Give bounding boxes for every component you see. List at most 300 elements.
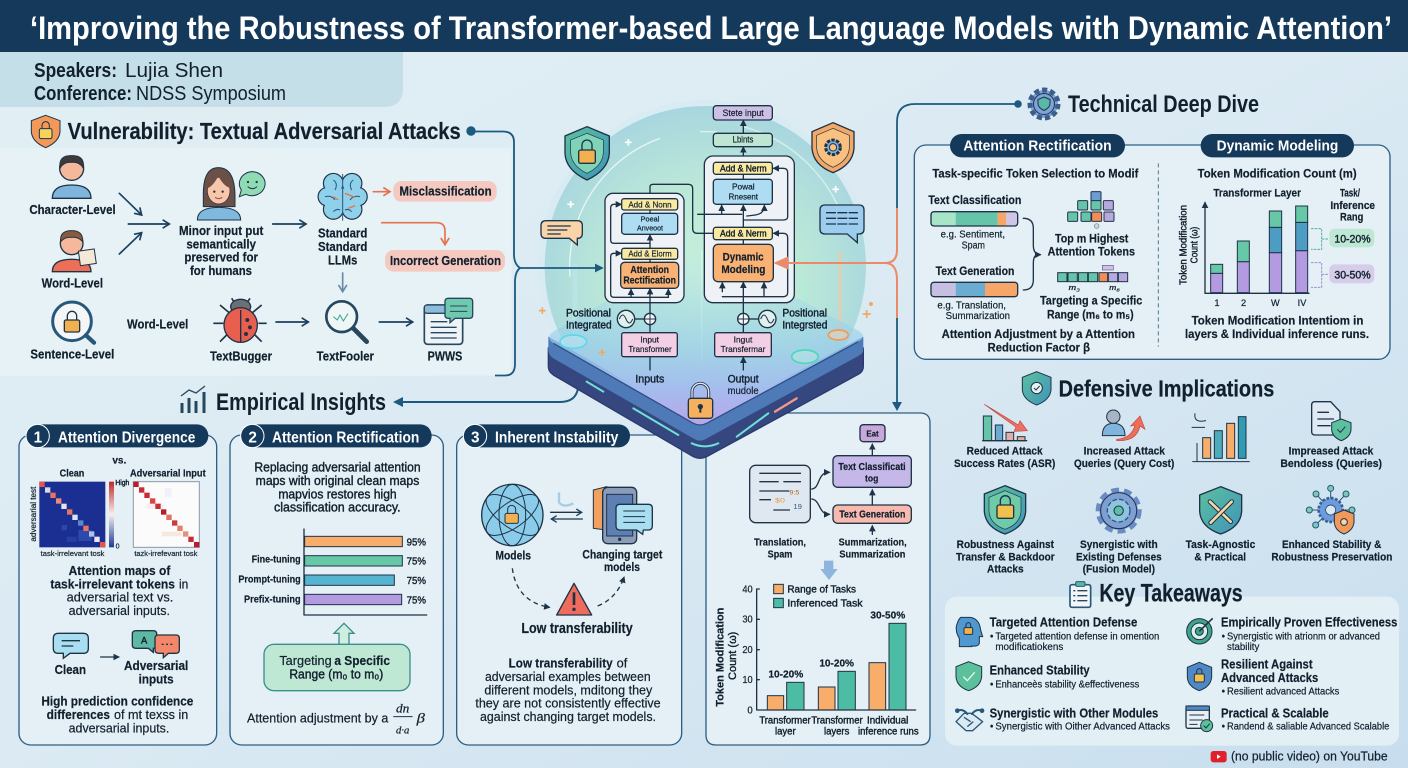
text: attention adjustment — [942, 327, 1135, 354]
bar chart: token modification count — [714, 584, 919, 737]
attention rectification block: Rectification — [623, 276, 676, 287]
arrow: to misclassification — [373, 189, 390, 194]
takeaway: synergistic: Synergistic with Other Modules — [990, 706, 1158, 720]
bar chart: accuracy: 75% — [407, 557, 426, 568]
text: top m tokens — [1048, 231, 1135, 259]
label: increased attack: Increased Attack — [1084, 446, 1166, 458]
heatmap: adversarial — [133, 482, 199, 547]
header pill: Attention Divergence — [58, 429, 195, 446]
label: impreased attack: Bendoless (Queries) — [1280, 458, 1382, 470]
takeaway: practical: • — [1222, 722, 1225, 733]
icon: adversarial bubbles — [132, 631, 179, 658]
label: enhanced stability: Robustness Preservation — [1271, 551, 1393, 563]
pill: dynamic modeling — [1201, 134, 1354, 157]
takeaway: resilient: Resilient Against — [1221, 657, 1313, 671]
heatmap labels: tazk-irrefevant tosk — [134, 549, 197, 558]
chart labels: Token Modification — [1179, 205, 1190, 285]
icon: chart empirical insights — [181, 386, 205, 413]
bar chart: token modification count: inference runs — [858, 726, 919, 737]
heading: key takeaways: Key Takeaways — [1099, 581, 1243, 608]
icon: blue message bubble — [820, 205, 864, 243]
attention rectification block: Attention — [630, 265, 669, 276]
box: state input — [713, 106, 772, 120]
label: robustness: Attacks — [987, 564, 1024, 576]
text: positional labels: Positional — [782, 308, 827, 320]
callout: targeting range: a Specific — [334, 654, 390, 668]
icon: document — [750, 465, 810, 523]
formula: attention adjustment: dn — [396, 701, 409, 715]
bar chart: token modification count: Transformer — [811, 715, 863, 726]
formula: attention adjustment: Attention adjustment by a — [247, 711, 389, 725]
bracket arrow — [1023, 218, 1040, 290]
pill: incorrect generation — [385, 250, 505, 272]
text: low transferability description: adversarial examples between — [485, 670, 651, 684]
text: attention adjustment: Reduction Factor β — [988, 340, 1090, 354]
stacked bar chart: W — [1271, 298, 1280, 308]
text: positional labels: Integrated — [566, 319, 612, 331]
takeaway: practical — [1221, 706, 1389, 733]
feed forward block: Powal — [732, 182, 755, 192]
takeaway: empirically proven — [1221, 616, 1397, 653]
box: text generation: Text Generation — [839, 510, 905, 521]
box: exit — [860, 425, 885, 442]
text: textfooler: TextFooler — [317, 350, 374, 364]
stacked bar chart — [1205, 203, 1309, 308]
arrow: minor input to LLM — [273, 221, 306, 226]
icon: green shield with lock — [565, 127, 609, 180]
text: standard LLMs: Standard — [318, 240, 367, 254]
icon: adversarial bubbles: A — [141, 636, 148, 646]
text: inputs and outputs — [635, 374, 759, 397]
bar chart: token modification count: 10-20% — [768, 669, 803, 680]
label: enhanced stability — [1271, 539, 1393, 563]
label: robustness — [956, 539, 1055, 576]
box: limits — [713, 133, 772, 147]
text: attention maps: task-irrelevant tokens — [50, 577, 175, 591]
bar chart: token modification count: layers — [824, 726, 849, 737]
stacked bar chart: IV — [1298, 298, 1307, 308]
label: word-level second: Word-Level — [127, 318, 188, 332]
text: modification intention — [1185, 314, 1369, 341]
arrow: LLM to textfooler — [340, 272, 345, 292]
label: increased attack: Queries (Query Cost) — [1074, 458, 1175, 470]
label: reduced attack: Reduced Attack — [967, 446, 1043, 458]
feed forward: Anveoot — [637, 223, 664, 232]
arrow: clean to adversarial — [101, 655, 119, 659]
bar chart: token modification count: layer — [775, 726, 796, 737]
bar chart: token modification count: Token Modification — [714, 607, 726, 707]
add and norm second: Add & Elorm — [628, 249, 672, 259]
wiring — [611, 121, 788, 370]
takeaway: synergistic — [990, 706, 1170, 733]
icon: document: $0 — [775, 497, 785, 504]
central illustration: transformer architecture on platform — [539, 100, 873, 458]
takeaway: resilient: • — [1222, 686, 1225, 697]
text: models and targets: Changing target — [582, 548, 662, 562]
label: impreased attack — [1280, 446, 1382, 470]
label: impreased attack: Impreased Attack — [1289, 446, 1374, 458]
bar chart: token modification count: Inferenced Task — [787, 599, 864, 610]
header pill: Inherent Instability — [495, 429, 619, 446]
bar chart: accuracy: 75% — [407, 595, 426, 606]
text: minor input: semantically — [186, 237, 256, 251]
icon: reduced bars — [983, 404, 1027, 441]
icon: blue shield lock — [1187, 662, 1212, 691]
box: text generation — [833, 505, 911, 523]
label: reduced attack — [954, 446, 1056, 470]
text generation bar: Text Generation — [936, 264, 1014, 278]
box: input transformer left: Transformer — [628, 344, 672, 354]
chart labels: Inference — [1330, 200, 1375, 212]
takeaway: enhanced stability: • — [990, 679, 993, 690]
icon: head with lock — [956, 617, 983, 647]
text: models and targets: models — [604, 560, 640, 574]
icon: clean bubble — [53, 633, 88, 658]
arrow: down to chart — [820, 561, 838, 580]
icon: person with arrow — [1102, 410, 1145, 441]
bar chart: token modification count: 10 — [742, 675, 753, 686]
heatmap labels: adversarial test — [29, 486, 38, 542]
text: minor input — [179, 224, 264, 278]
header pill — [463, 424, 630, 448]
icon: peach message bubble — [541, 221, 582, 245]
formula: attention adjustment: d·a — [396, 725, 409, 736]
takeaway: resilient: Advanced Attacks — [1221, 671, 1318, 685]
text: minor input: for humans — [190, 264, 252, 278]
icon: platform lock — [688, 383, 713, 418]
encoder stack — [605, 193, 684, 303]
header pill — [26, 424, 208, 448]
arrow: up to chart — [334, 623, 354, 646]
box: exit: Eat — [866, 428, 879, 438]
box: text classification: tog — [865, 474, 879, 484]
takeaway: targeted attention defense: Targeted Attention Defense — [990, 616, 1137, 630]
takeaway: enhanced stability: Enhanceès stability &effectiveness — [995, 679, 1139, 690]
label: reduced attack: Success Rates (ASR) — [954, 458, 1056, 470]
takeaway: targeted attention defense: Targeted attention defense in omention — [995, 631, 1159, 642]
dynamic modeling block: Modeling — [721, 264, 765, 276]
text: clean and adversarial: Adversarial — [124, 659, 188, 673]
heatmap labels: Adversarial Input — [130, 469, 206, 480]
speaker and conference block: NDSS Symposium — [136, 83, 286, 105]
bar chart: token modification count: 0 — [747, 705, 753, 716]
chart labels: Rang — [1340, 212, 1363, 224]
text: textbugger: TextBugger — [210, 350, 272, 364]
text: modification intention: Token Modification Intentiom in — [1192, 314, 1363, 328]
text: targeting range: Range (m₆ to m₅) — [1047, 307, 1134, 321]
icon: shield check — [1022, 372, 1051, 405]
icon: brain — [319, 174, 367, 221]
stacked bar chart: 1 — [1214, 298, 1220, 308]
box: input transformer right: Ingut — [734, 335, 753, 345]
range pills: 10-20% — [1334, 234, 1371, 246]
text: low transferability description: different models, mditong they — [484, 683, 653, 697]
icon: target — [1187, 618, 1213, 644]
text: clean and adversarial — [55, 659, 188, 687]
icon: warning triangle — [557, 583, 592, 615]
pill: dynamic modeling: Dynamic Modeling — [1217, 139, 1338, 155]
heatmap labels — [29, 456, 206, 558]
bar chart: accuracy — [238, 529, 427, 615]
takeaway: enhanced stability: Enhanced Stability — [990, 664, 1090, 678]
label: synergistic: Synergistic with — [1080, 539, 1158, 551]
text: modification intention: layers & Individual inference runs. — [1185, 327, 1369, 341]
panel: task flow and token modification chart — [706, 413, 930, 745]
add and norm top: Add & Nonn — [628, 199, 672, 209]
takeaway: resilient: Resilient advanced Attacks — [1227, 686, 1339, 697]
arrows: dashed transfer — [512, 568, 624, 607]
callout: targeting range — [264, 644, 410, 691]
text: attention adjustment: Attention Adjustment by a Attention — [942, 327, 1135, 341]
icon: top tokens — [1068, 192, 1114, 228]
text: targeting range: Targeting a Specific — [1040, 294, 1142, 308]
text: positional labels: Positional — [566, 308, 611, 320]
text: replacing maps: Replacing adversarial attention — [254, 461, 421, 475]
positional encoding symbols — [617, 310, 776, 328]
header pill: 2 — [248, 429, 257, 446]
text: attention maps: adversarial text vs. — [67, 591, 173, 605]
arrow: textfooler to pwws — [379, 319, 413, 324]
text: high prediction: differences — [47, 708, 110, 722]
icon: youtube — [1211, 751, 1227, 762]
heatmap labels: vs. — [112, 456, 127, 467]
box: input transformer left — [622, 333, 677, 357]
text: models and targets — [495, 548, 662, 574]
bar chart: token modification count: 20 — [742, 645, 753, 656]
pill: attention rectification — [950, 134, 1125, 157]
heatmap: clean — [39, 482, 105, 547]
text: high prediction: of mt texss in — [114, 708, 188, 722]
text: attention maps — [50, 564, 188, 618]
panel: attention divergence — [19, 424, 217, 745]
text: high prediction: High prediction confidence — [41, 695, 193, 709]
text: minor input: Minor input put — [179, 224, 264, 238]
arrows: models exchange — [551, 492, 582, 519]
attention rectification block — [621, 262, 679, 288]
bar chart: token modification count: Count (ω) — [727, 632, 739, 680]
arrows: task flow — [812, 444, 872, 534]
pill: attention rectification: Attention Rectification — [963, 139, 1112, 155]
takeaway: empirically proven: Synergistic with atrionm or advanced — [1227, 631, 1380, 642]
section: defensive implications — [954, 372, 1393, 576]
header pill: 1 — [34, 429, 43, 446]
title banner — [0, 0, 1408, 52]
text: positional labels: Integrsted — [782, 319, 827, 331]
feed forward: Poeal — [641, 215, 660, 224]
heatmap labels: Clean — [60, 469, 84, 480]
text generation bar: Summarization — [946, 311, 1010, 322]
range pills: 30-50% — [1334, 270, 1371, 282]
icon: handshake — [955, 708, 984, 731]
takeaway: resilient — [1221, 657, 1339, 697]
bar chart: token modification count: Individual — [867, 715, 908, 726]
text: pwws: PWWS — [428, 350, 462, 364]
bar chart: accuracy: Prefix-tuning — [244, 595, 301, 606]
arrow: orange connector into dynamic modeling — [776, 208, 897, 318]
bar chart: token modification count: 30-50% — [870, 610, 905, 621]
text: top m tokens: Attention Tokens — [1048, 245, 1135, 259]
formula: attention adjustment — [247, 701, 425, 736]
icon: robustness shield — [984, 486, 1026, 534]
pill: misclassification — [393, 181, 497, 202]
text: task examples: Summarization — [839, 549, 905, 560]
add and norm upper: Add & Nerm — [720, 164, 767, 174]
heading: low transferability: Low transferability — [521, 621, 633, 637]
label: task-agnostic — [1186, 539, 1255, 563]
arrows: attack levels to minor input — [119, 193, 169, 254]
speaker and conference block — [0, 52, 403, 107]
heading: defensive implications: Defensive Implications — [1059, 376, 1274, 402]
text classification bar: e.g. Sentiment, — [941, 230, 1005, 241]
takeaway: empirically proven: • — [1222, 631, 1225, 642]
text generation bar — [931, 264, 1018, 322]
box: input transformer right: Transfermar — [721, 344, 766, 354]
icon: woman with smile bubble — [197, 168, 265, 220]
icon: green shield check — [956, 662, 982, 691]
arrow: textbugger to textfooler — [276, 319, 308, 324]
icon: person character-level — [52, 156, 91, 198]
label: character-level: Character-Level — [29, 203, 116, 217]
icon: orange shield with gear — [812, 123, 854, 173]
icon: orange shield with lock — [31, 115, 60, 148]
bar chart: token modification count: Transformer — [759, 715, 811, 726]
chart labels — [1179, 188, 1375, 285]
sparkles — [539, 139, 873, 356]
box: limits: Lbints — [733, 135, 754, 145]
text: inputs and outputs: mudole — [728, 386, 759, 397]
text: low transferability description: Low transferability — [509, 657, 613, 671]
label: enhanced stability: Enhanced Stability & — [1282, 539, 1381, 551]
panel: technical deep dive — [914, 134, 1390, 359]
callout: targeting range: Range (m₀ to m₀) — [289, 667, 383, 681]
glow circle — [539, 100, 872, 433]
box: input transformer right — [715, 333, 771, 357]
text: task examples — [754, 538, 907, 560]
header pill — [241, 424, 432, 448]
text: attention maps: adversarial inputs. — [69, 604, 170, 618]
pill: misclassification: Misclassification — [399, 185, 492, 199]
heading: vulnerability: Vulnerability: Textual Adversarial Attacks — [68, 118, 461, 144]
stacked bar chart: 2 — [1241, 298, 1246, 308]
feed forward block: Rnesent — [729, 192, 759, 202]
icon: token range — [1058, 265, 1128, 292]
label: robustness: Transfer & Backdoor — [956, 551, 1055, 563]
section: key takeaways — [945, 581, 1399, 764]
chart labels: Task/ — [1340, 188, 1360, 200]
speaker and conference block: Conference: — [34, 83, 132, 105]
add and norm lower: Add & Nerm — [720, 229, 767, 239]
text: replacing maps — [254, 461, 421, 515]
icon: phone with bubble — [593, 487, 652, 544]
bar chart: token modification count: 30 — [742, 615, 753, 626]
icon: magnifier with lock — [53, 302, 94, 343]
text: high prediction — [41, 695, 193, 735]
arrow: technical deep dive connector — [892, 100, 1022, 411]
arrow: platform to empirical insights — [395, 388, 578, 402]
icon: bug — [213, 298, 267, 342]
takeaway: practical: Randend & saliable Advanced Scalable — [1227, 722, 1389, 733]
platform — [548, 247, 863, 458]
icon: document with bubble — [424, 298, 473, 344]
header pill: Attention Rectification — [272, 429, 419, 446]
bar chart: token modification count: 40 — [742, 585, 753, 596]
text: low transferability description: of — [617, 657, 628, 671]
panel: vulnerability textual adversarial attacks — [0, 115, 512, 376]
icon: token range: m₈ — [1109, 283, 1120, 292]
dynamic modeling block — [713, 244, 773, 282]
box: text classification: Text Classificati — [838, 462, 906, 473]
text: positional labels — [566, 308, 827, 331]
bar chart: accuracy: Prompt-tuning — [238, 575, 301, 586]
label: sentence-level: Sentence-Level — [30, 348, 114, 362]
takeaway: practical: Practical & Scalable — [1221, 706, 1329, 720]
text: task examples: Translation, — [754, 538, 806, 549]
chart labels: Transformer Layer — [1213, 188, 1301, 200]
icon: document: 19 — [793, 502, 802, 511]
bar chart: accuracy: 75% — [407, 576, 426, 587]
text: minor input: preserved for — [184, 251, 258, 265]
chart labels: Count (ω) — [1190, 227, 1201, 263]
text: standard LLMs — [318, 227, 367, 267]
text: task examples: Spam — [768, 549, 792, 560]
icon: clipboard — [1070, 582, 1091, 607]
label: task-agnostic: & Practical — [1194, 551, 1246, 563]
text: video note: (no public video) on YouTube — [1231, 750, 1388, 764]
text: clean and adversarial: Clean — [55, 663, 86, 677]
text: clean and adversarial: inputs — [139, 673, 174, 687]
label: robustness: Robustness Against — [957, 539, 1054, 551]
box: input transformer left: Input — [640, 335, 660, 345]
text: low transferability description: they are not consistently effective — [475, 697, 661, 711]
label: increased attack — [1074, 446, 1175, 470]
icon: gear shield technical deep dive — [1030, 90, 1058, 118]
heading: empirical insights: Empirical Insights — [216, 389, 386, 416]
box: text classification — [833, 456, 911, 487]
add and norm lower — [713, 227, 772, 240]
colorbar: High — [115, 480, 129, 487]
text: inputs and outputs: Output — [728, 374, 759, 386]
text: standard LLMs: LLMs — [328, 253, 357, 267]
takeaway: empirically proven: stability — [1227, 642, 1259, 653]
heading: token selection: Task-specific Token Selection to Modif — [932, 167, 1139, 181]
colorbar: 0 — [116, 544, 120, 551]
box: state input: Stete input — [723, 108, 764, 118]
text generation bar: e.g. Translation, — [937, 301, 1006, 312]
text: replacing maps: maps with original clean maps — [256, 474, 419, 488]
panel background — [945, 597, 1399, 746]
icon: token range: m₃ — [1068, 283, 1080, 292]
text classification bar: Spam — [962, 240, 985, 251]
arrow: vulnerability connector into encoder — [467, 127, 602, 376]
label: synergistic: Existing Defenses — [1076, 551, 1162, 563]
range pills — [1311, 229, 1374, 287]
text: replacing maps: mapvios restores high — [278, 487, 397, 501]
text classification bar — [928, 193, 1021, 251]
label: task-agnostic: Task-Agnostic — [1186, 539, 1255, 551]
heading: token modification count: Token Modification Count (m) — [1198, 167, 1357, 181]
text: task examples: Summarization, — [839, 538, 907, 549]
header pill: 3 — [471, 429, 480, 446]
text: standard LLMs: Standard — [318, 227, 367, 241]
text: inputs and outputs: Inputs — [635, 374, 665, 386]
text: targeting range — [1040, 294, 1142, 321]
icon: magnifier textfooler — [326, 301, 367, 342]
icon: network gear with shield — [1306, 485, 1355, 534]
icon: wrench shield — [1200, 487, 1242, 534]
icon: rising bar chart — [1192, 413, 1249, 462]
dynamic modeling block: Dynamic — [723, 252, 764, 264]
callout: targeting range: Targeting — [279, 654, 332, 668]
